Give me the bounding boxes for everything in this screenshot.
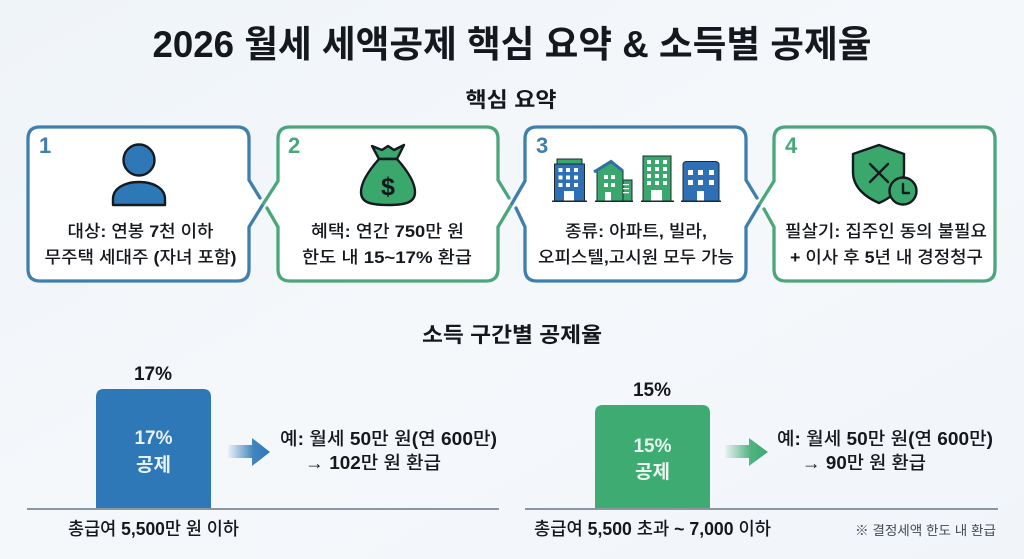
heading: key summary: 핵심 요약 <box>466 89 556 112</box>
example text <box>777 429 993 473</box>
bar label: 15% <box>633 436 672 457</box>
building: goshiwon blue <box>681 162 721 202</box>
card 1 text <box>44 222 236 267</box>
icon: buildings <box>552 156 721 202</box>
example text: 예: 월세 50만 원(연 600만) <box>777 429 993 449</box>
card 2 text: 한도 내 15~17% 환급 <box>302 248 472 267</box>
axis line <box>27 508 499 510</box>
card number 2: 2 <box>288 133 300 158</box>
income range label: 총급여 5,500 초과 ~ 7,000 이하 <box>534 519 771 539</box>
card number 3: 3 <box>536 133 548 158</box>
card 2 text <box>302 222 472 267</box>
panel: card 4 must know <box>760 127 995 281</box>
arrow <box>725 438 768 466</box>
chart: 17 percent group <box>27 364 499 539</box>
title: 2026 월세 세액공제 핵심 요약 & 소득별 공제율 <box>152 24 872 65</box>
example text: → 102만 원 환급 <box>305 453 441 473</box>
bar label: 공제 <box>635 461 670 483</box>
card 1 text: 대상: 연봉 7천 이하 <box>68 222 214 241</box>
heading: deduction rate by income: 소득 구간별 공제율 <box>422 324 602 347</box>
card number 4: 4 <box>785 133 798 158</box>
icon: money bag: $ <box>381 173 395 201</box>
building: apartment blue <box>552 159 587 202</box>
icon: person <box>113 144 165 205</box>
bar label <box>633 436 672 483</box>
card number 1: 1 <box>39 133 51 158</box>
chart: 15 percent group <box>525 380 998 539</box>
bar label: 17% <box>134 428 173 449</box>
example text <box>280 429 497 473</box>
card 1 text: 무주택 세대주 (자녀 포함) <box>44 248 236 267</box>
arrow <box>228 438 270 466</box>
card 4 text: + 이사 후 5년 내 경정청구 <box>790 248 983 267</box>
bar label <box>134 428 173 476</box>
panel: card 1 target <box>28 127 264 281</box>
building: villa green <box>594 162 633 202</box>
bar 17% <box>96 389 211 509</box>
icon: money bag <box>361 145 415 205</box>
income range label: 총급여 5,500만 원 이하 <box>68 519 239 539</box>
icon: shield with clock <box>853 145 916 204</box>
panel: card 3 housing types <box>512 127 760 281</box>
panel: card 2 benefit <box>264 127 512 281</box>
card 2 text: 혜택: 연간 750만 원 <box>311 222 464 241</box>
bar label: 공제 <box>136 454 171 476</box>
card 3 text <box>538 222 734 267</box>
footnote: ※ 결정세액 한도 내 환급 <box>855 523 996 538</box>
building: office green <box>641 156 674 202</box>
card 3 text: 종류: 아파트, 빌라, <box>565 222 707 241</box>
example text: → 90만 원 환급 <box>802 453 926 473</box>
card 4 text: 필살기: 집주인 동의 불필요 <box>785 222 987 241</box>
value label 15%: 15% <box>633 380 671 401</box>
axis line <box>525 508 998 510</box>
card 3 text: 오피스텔,고시원 모두 가능 <box>538 248 734 267</box>
example text: 예: 월세 50만 원(연 600만) <box>280 429 497 449</box>
card 4 text <box>785 222 987 267</box>
value label 17%: 17% <box>134 364 172 385</box>
bar 15% <box>595 405 710 509</box>
